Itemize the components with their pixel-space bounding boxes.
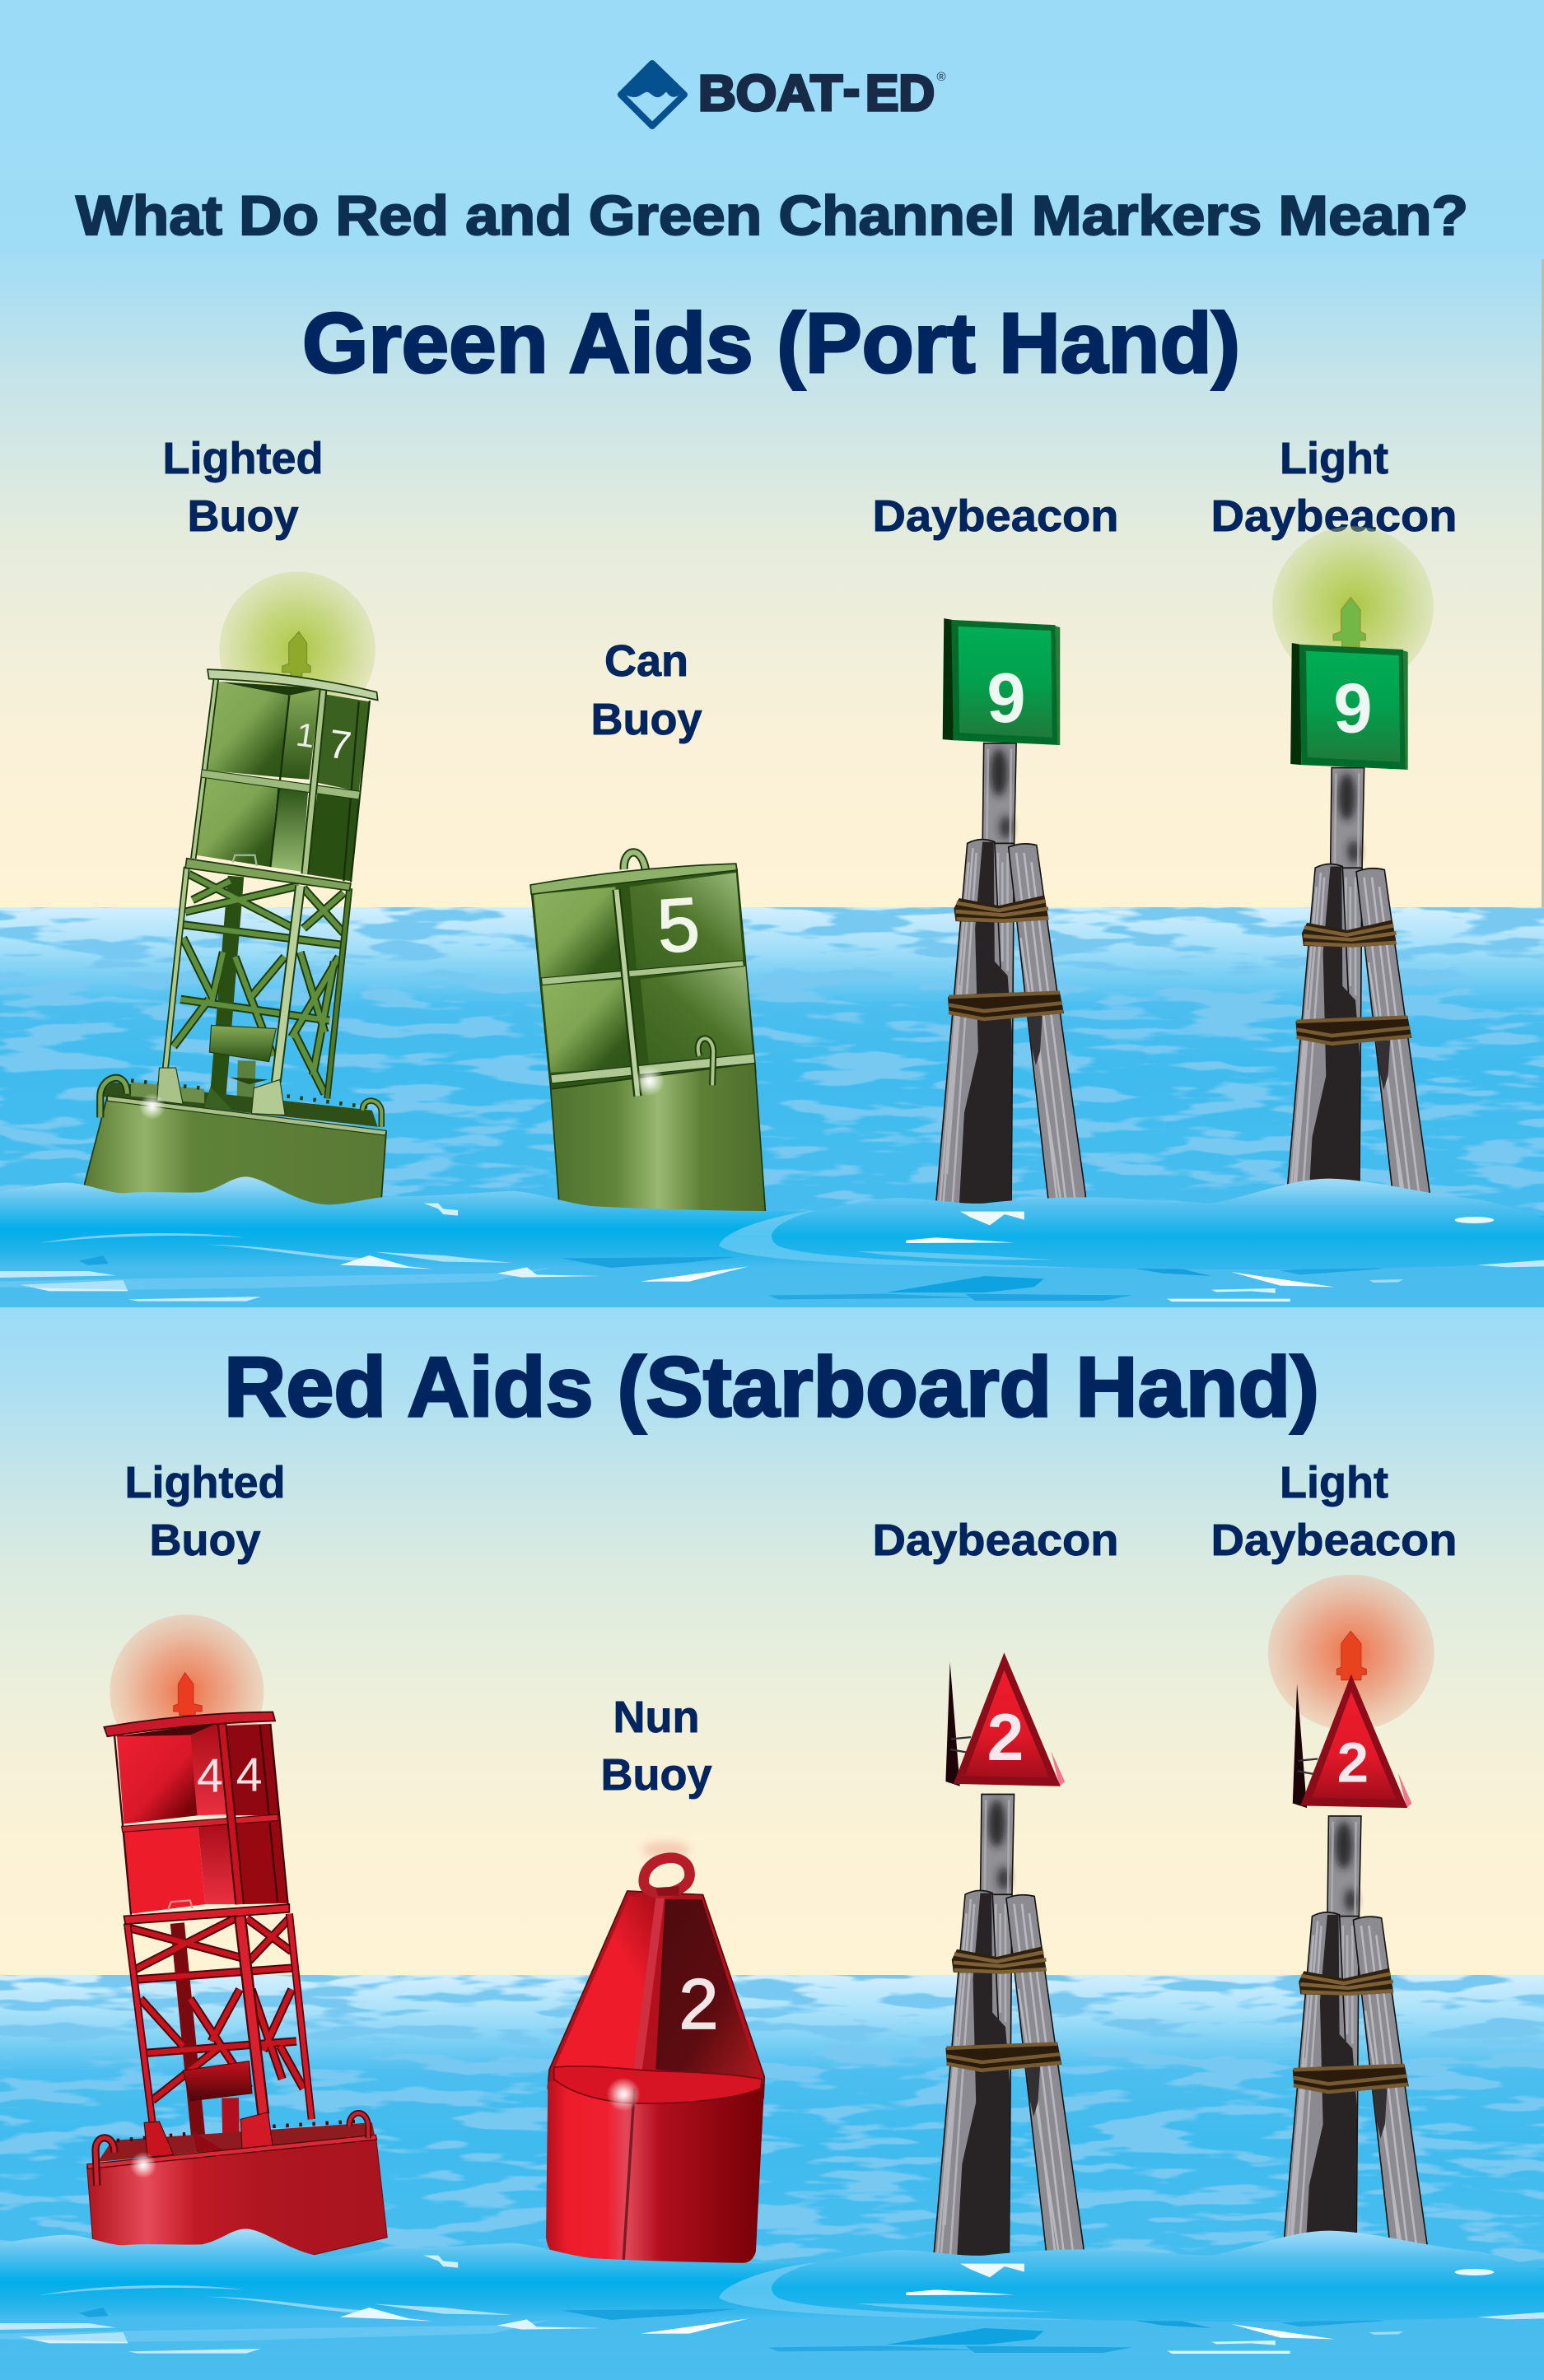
upper cage faces — [204, 682, 289, 777]
label: green lighted buoy: Lighted — [163, 434, 323, 483]
icon: green light daybeacon: 9 — [1333, 668, 1373, 748]
icon: can buoy: 5 — [655, 883, 702, 969]
icon: green daybeacon: 9 — [987, 659, 1026, 737]
panel: green aids scene — [0, 0, 1544, 1311]
logo: Boat-Ed: BOAT — [698, 65, 842, 121]
icon: red lighted buoy: 4 — [197, 1749, 223, 1802]
icon: nun buoy: 2 — [679, 1965, 718, 2044]
icon: red light daybeacon: 2 — [1337, 1731, 1369, 1795]
icon: green daybeacon lantern — [1333, 598, 1365, 647]
label: red daybeacon: Daybeacon — [873, 1516, 1118, 1565]
icon: green lighted buoy: 1 — [294, 716, 317, 755]
upper cage faces — [117, 1735, 198, 1824]
label: nun buoy: Buoy — [601, 1750, 711, 1800]
label: nun buoy: Nun — [613, 1693, 699, 1742]
icon: can buoy — [530, 852, 767, 1231]
label: green light daybeacon — [1210, 434, 1458, 541]
icon: green daybeacon — [934, 618, 1085, 1231]
base deck — [98, 1082, 378, 1127]
heading: green aids: Green Aids (Port Hand) — [302, 296, 1240, 390]
foreground wave: red scene — [0, 2229, 1544, 2354]
icon: red daybeacon: 2 — [987, 1701, 1024, 1775]
title: What Do Red and Green Channel Markers Mean? — [76, 184, 1468, 247]
label: red light daybeacon: Light — [1280, 1458, 1388, 1507]
logo: Boat-Ed: - — [843, 61, 860, 117]
icon: nun buoy — [546, 1842, 764, 2263]
logo: Boat-Ed: ® — [936, 70, 946, 84]
label: red lighted buoy: Buoy — [150, 1516, 260, 1565]
heading: red aids: Red Aids (Starboard Hand) — [224, 1339, 1319, 1434]
label: green daybeacon: Daybeacon — [873, 491, 1118, 541]
can lower body — [551, 1063, 767, 1231]
logo: Boat-Ed — [621, 61, 946, 126]
label: green lighted buoy: Buoy — [188, 491, 298, 541]
icon: red daybeacon lantern — [1336, 1632, 1366, 1680]
nun lower body — [546, 2081, 764, 2263]
label: red light daybeacon — [1210, 1458, 1458, 1565]
icon: green lighted buoy — [85, 571, 386, 1231]
label: green light daybeacon: Daybeacon — [1210, 491, 1458, 541]
panel: red aids scene — [0, 1307, 1544, 2380]
icon: red lighted buoy — [87, 1614, 387, 2255]
icon: red lantern — [174, 1673, 202, 1716]
base — [85, 1096, 386, 1231]
icon: green lighted buoy: 7 — [326, 722, 354, 769]
label: can buoy: Buoy — [591, 695, 702, 744]
icon: red lighted buoy: 4 — [236, 1749, 263, 1801]
icon: green light daybeacon — [1272, 526, 1434, 1255]
label: green light daybeacon: Light — [1280, 434, 1388, 483]
foreground wave: green scene — [0, 1176, 1544, 1302]
icon: red light daybeacon — [1268, 1575, 1434, 2303]
logo: Boat-Ed: ED — [865, 65, 935, 121]
icon: green lantern — [282, 631, 310, 676]
label: can buoy: Can — [604, 636, 688, 686]
icon: red daybeacon — [932, 1652, 1084, 2282]
label: red lighted buoy: Lighted — [125, 1458, 285, 1507]
red base — [87, 2135, 387, 2255]
label: red light daybeacon: Daybeacon — [1210, 1516, 1458, 1565]
